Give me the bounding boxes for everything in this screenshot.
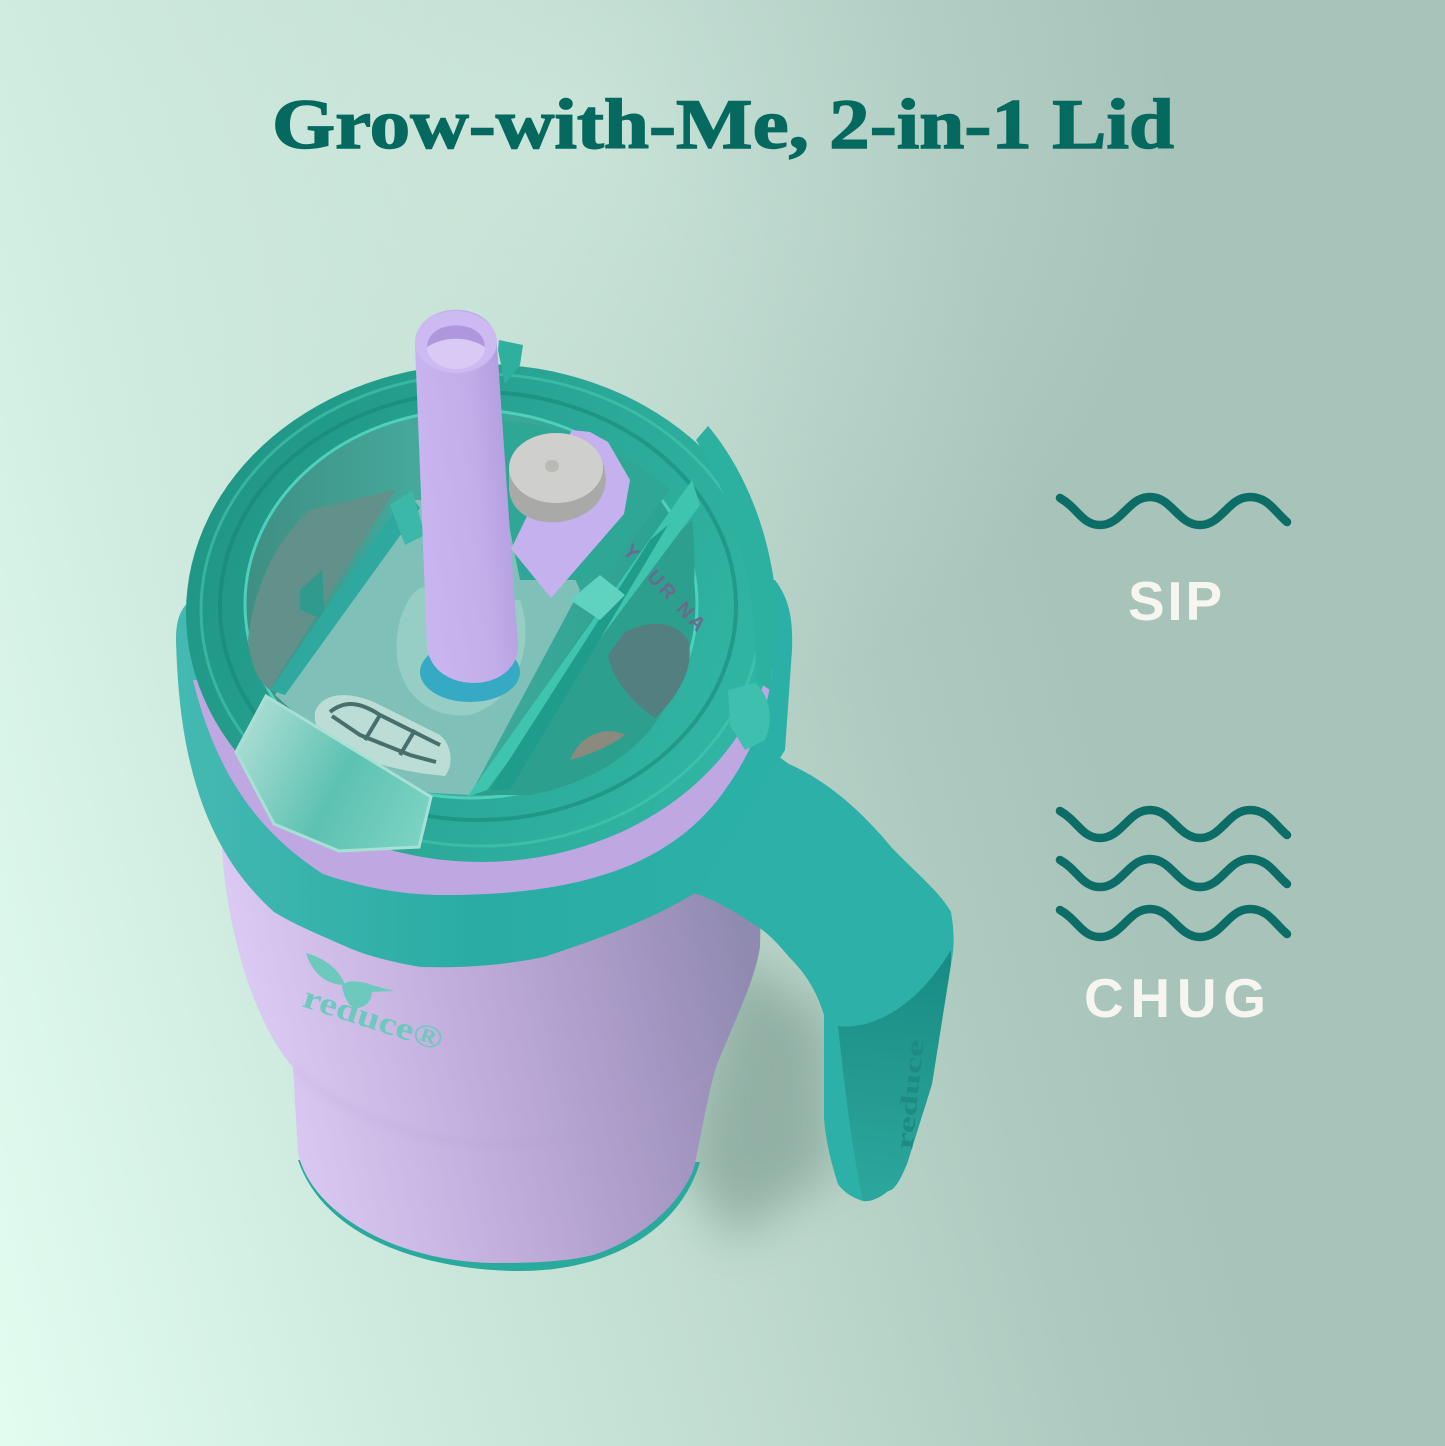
divider bars (467, 480, 700, 797)
right clip (696, 426, 777, 690)
tumbler base (298, 1160, 700, 1271)
sip icon (1060, 497, 1287, 525)
handle inner shade (838, 950, 951, 1201)
stopper plug (509, 433, 606, 522)
lavender neck (193, 670, 772, 895)
title: Grow-with-Me, 2-in-1 Lid (272, 86, 1174, 164)
sip label: SIP (1128, 570, 1222, 632)
product shadow (680, 950, 835, 1240)
brand logo (299, 953, 448, 1057)
straw (415, 310, 518, 683)
printed shape (608, 624, 690, 718)
silicone collar (176, 580, 792, 967)
lid rim (186, 364, 776, 862)
brand logo: reduce® (299, 978, 448, 1057)
tumbler body (222, 847, 762, 1263)
lower body crease (293, 1067, 716, 1144)
right window (470, 520, 695, 795)
chug icon (1060, 810, 1287, 937)
left window (248, 490, 395, 690)
right nub (728, 683, 770, 750)
printed name: YOUR NA (618, 540, 712, 638)
straw well (396, 587, 526, 715)
vent grip (315, 695, 451, 776)
product: toddler tumbler (176, 310, 954, 1271)
top tab (498, 340, 523, 384)
handle (681, 740, 954, 1201)
upper band (500, 420, 670, 580)
lid floor (245, 410, 697, 798)
chug label: CHUG (1084, 967, 1266, 1029)
front slider (236, 696, 431, 851)
stopper arm (511, 430, 630, 598)
centre panel (275, 500, 580, 795)
handle embossed logo: reduce (892, 1038, 930, 1151)
lid (186, 310, 777, 862)
